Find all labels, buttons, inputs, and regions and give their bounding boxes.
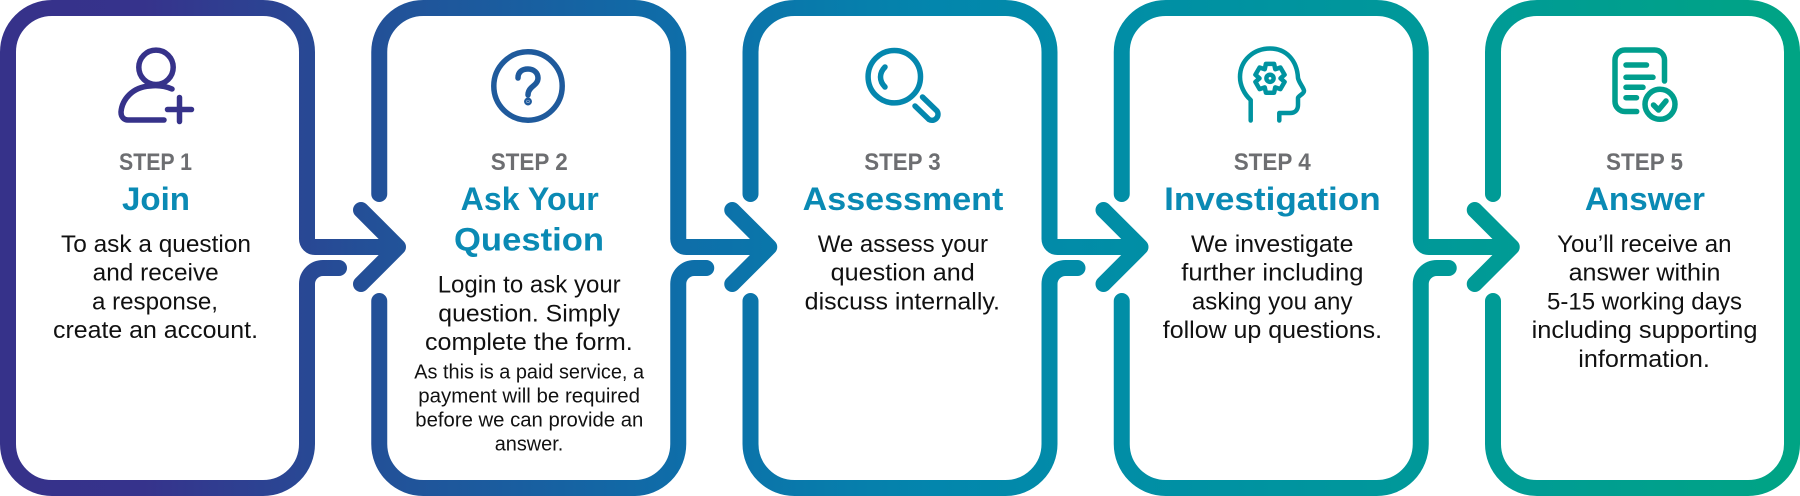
body text: and receive: [93, 260, 219, 287]
heading: Question: [454, 222, 604, 258]
step label: STEP 3: [864, 149, 941, 176]
icon: magnifying glass: [868, 50, 938, 120]
body text: You’ll receive an: [1557, 231, 1732, 258]
body text: create an account.: [53, 317, 258, 344]
heading: Assessment: [803, 181, 1004, 217]
panel: step 2 ask your question: [379, 8, 706, 488]
body text: further including: [1181, 260, 1364, 287]
body text: follow up questions.: [1163, 317, 1382, 344]
body text: Login to ask your: [438, 272, 621, 299]
panel frame 2: [379, 8, 706, 488]
panel frame 3: [750, 8, 1078, 488]
arrow: step 4 to step 5: [1436, 210, 1512, 284]
payment note: answer.: [495, 433, 563, 455]
step label: STEP 4: [1234, 149, 1311, 176]
body text: We investigate: [1191, 231, 1353, 258]
body text: [1532, 231, 1758, 373]
payment note: payment will be required: [418, 385, 640, 407]
payment note: [414, 361, 645, 455]
body text: 5-15 working days: [1547, 288, 1742, 315]
icon: document with check: [1615, 50, 1675, 119]
body text: [1163, 231, 1382, 344]
panel: step 4 investigation: [1122, 8, 1449, 488]
body text: question and: [831, 260, 975, 287]
body text: To ask a question: [61, 231, 251, 258]
body text: [425, 272, 633, 356]
arrow: step 1 to step 2: [322, 210, 398, 284]
heading: Join: [122, 181, 190, 217]
body text: discuss internally.: [805, 288, 1000, 315]
heading: Investigation: [1164, 181, 1381, 217]
body text: information.: [1578, 346, 1710, 373]
body text: complete the form.: [425, 329, 633, 356]
icon: question mark: [494, 52, 562, 120]
heading: [454, 181, 604, 258]
step label: STEP 2: [491, 149, 568, 176]
body text: asking you any: [1192, 288, 1352, 315]
payment note: As this is a paid service, a: [414, 361, 645, 383]
body text: including supporting: [1532, 317, 1758, 344]
body text: question. Simply: [438, 300, 620, 327]
body text: a response,: [92, 288, 218, 315]
panel: step 5 answer: [1493, 8, 1792, 488]
payment note: before we can provide an: [415, 409, 643, 431]
icon: head with gear: [1240, 48, 1304, 120]
heading: Answer: [1585, 181, 1705, 217]
panel frame 5: [1493, 8, 1792, 488]
step label: STEP 1: [119, 149, 192, 176]
step label: STEP 5: [1606, 149, 1683, 176]
panel frame 4: [1122, 8, 1449, 488]
panel: step 1 join: [8, 8, 339, 488]
body text: [53, 231, 258, 344]
panel frame 1: [8, 8, 339, 488]
panel: step 3 assessment: [750, 8, 1078, 488]
arrow: step 3 to step 4: [1064, 210, 1140, 284]
heading: Ask Your: [461, 181, 599, 217]
arrow: step 2 to step 3: [693, 210, 769, 284]
body text: We assess your: [818, 231, 988, 258]
body text: answer within: [1569, 260, 1720, 287]
icon: add user: [121, 50, 192, 121]
body text: [805, 231, 1000, 315]
